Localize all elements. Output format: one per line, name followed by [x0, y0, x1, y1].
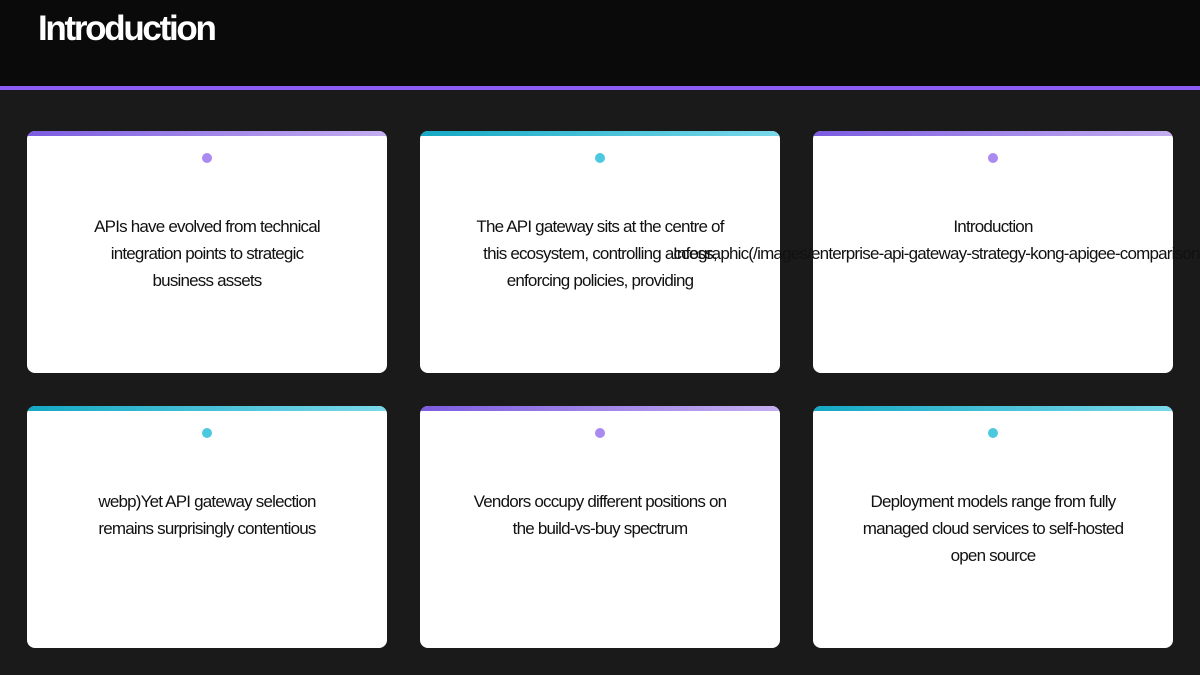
text: the build-vs-buy spectrum — [513, 519, 687, 538]
card 3 — [813, 131, 1173, 373]
title: Introduction — [38, 9, 215, 48]
text — [476, 217, 724, 290]
dot — [988, 153, 998, 163]
card 2 — [420, 131, 780, 373]
header — [0, 0, 1200, 86]
text: business assets — [153, 271, 261, 290]
text: integration points to strategic — [111, 244, 303, 263]
text: APIs have evolved from technical — [94, 217, 320, 236]
card 1 — [27, 131, 387, 373]
card 4 — [27, 406, 387, 648]
card 5 — [420, 406, 780, 648]
text: this ecosystem, controlling access, — [483, 244, 717, 263]
text: managed cloud services to self-hosted — [863, 519, 1123, 538]
text: Vendors occupy different positions on — [474, 492, 726, 511]
text: enforcing policies, providing — [507, 271, 693, 290]
text — [98, 492, 316, 538]
card 6 — [813, 406, 1173, 648]
text: Deployment models range from fully — [871, 492, 1115, 511]
text: webp)Yet API gateway selection — [98, 492, 316, 511]
text: open source — [951, 546, 1035, 565]
text — [94, 217, 320, 290]
text: The API gateway sits at the centre of — [476, 217, 724, 236]
dot — [595, 153, 605, 163]
dot — [595, 428, 605, 438]
dot — [202, 428, 212, 438]
text: Introduction — [953, 217, 1033, 236]
text — [863, 492, 1123, 565]
text: remains surprisingly contentious — [98, 519, 316, 538]
dot — [202, 153, 212, 163]
dot — [988, 428, 998, 438]
text — [474, 492, 726, 538]
